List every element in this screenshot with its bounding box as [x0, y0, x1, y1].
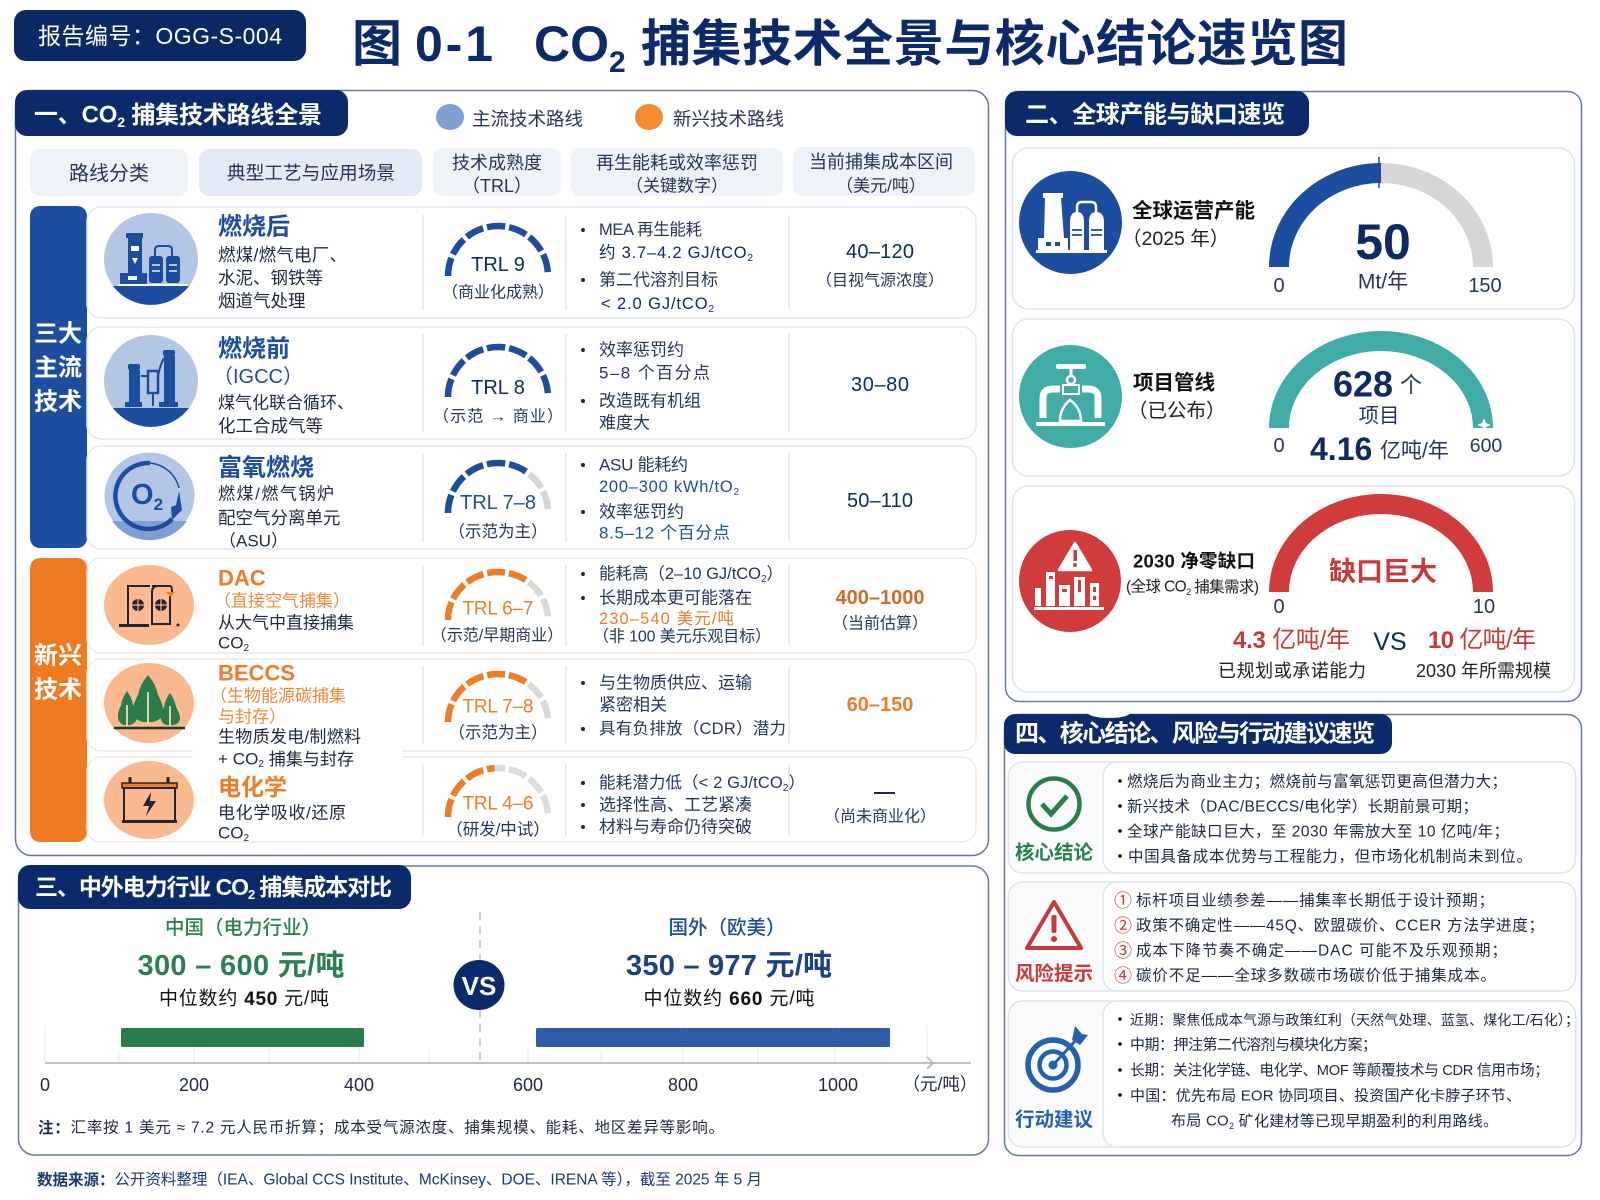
- key figures: 改造既有机组: [599, 392, 701, 410]
- actions list: 2: [1229, 1121, 1234, 1131]
- route description: [214, 566, 354, 654]
- cost range: （当前估算）: [832, 614, 928, 632]
- card: core conclusions: [1008, 762, 1576, 873]
- title: 图: [352, 16, 402, 72]
- card: action recommendations: [1008, 1001, 1579, 1147]
- risks list: 成本下降节奏不确定——DAC 可能不及乐观预期；: [1136, 942, 1507, 960]
- cost range: 400–1000: [836, 587, 924, 609]
- key figures: 能耗高（2–10 GJ/tCO: [599, 565, 761, 583]
- route description: 与封存）: [218, 708, 286, 726]
- gauge: large gap: 缺口巨大: [1329, 557, 1437, 587]
- gauge: TRL 4-6: （研发/中试）: [446, 820, 550, 839]
- table header row: 技术成熟度: [452, 153, 542, 173]
- BECCS overflow line: 捕集与封存: [264, 750, 354, 768]
- risks list: [1114, 891, 1544, 986]
- category bar: mainstream: 主流: [34, 354, 82, 382]
- data source: 数据来源：公开资料整理（IEA、Global CCS Institute、McKinsey、DOE、IRENA 等），截至 2025 年 5 月: [37, 1170, 762, 1188]
- key figures: （非 100 美元乐观目标）: [593, 628, 771, 646]
- gauge: TRL 7-8: TRL 7–8: [460, 492, 536, 514]
- icon: check mark: [1015, 778, 1093, 864]
- heading: section two: 二、全球产能与缺口速览: [1025, 102, 1285, 128]
- white patch bridging BECCS text: [193, 750, 402, 758]
- key figures: 长期成本更可能落在: [599, 588, 752, 608]
- gauge: TRL 7-8: [448, 674, 548, 742]
- capacity label: 全球运营产能: [1132, 198, 1255, 222]
- gap comparison: VS: [1373, 628, 1407, 656]
- route description: （IGCC）: [213, 365, 303, 388]
- China cost block: 300 – 600 元/吨: [138, 949, 344, 982]
- key figures: [581, 220, 753, 314]
- cost range: [816, 241, 944, 290]
- gauge: 628 projects: 600: [1470, 435, 1502, 457]
- gauge: TRL 8: （示范 → 商业）: [433, 408, 563, 426]
- gap comparison: 已规划或承诺能力: [1218, 661, 1366, 681]
- category bar: mainstream: 三大: [34, 320, 82, 348]
- legend: 新兴技术路线: [673, 108, 784, 130]
- icon: trees: [104, 663, 194, 743]
- gap comparison: 10 亿吨/年: [1428, 626, 1536, 654]
- key figures: 紧密相关: [599, 696, 667, 714]
- route description: 燃煤/燃气电厂、: [218, 245, 347, 265]
- overseas cost block: 350 – 977 元/吨: [626, 949, 832, 982]
- table header row: 当前捕集成本区间: [809, 152, 953, 172]
- risks list: 标杆项目业绩参差——捕集率长期低于设计预期；: [1136, 892, 1494, 910]
- key figures: 能耗潜力低（< 2 GJ/tCO: [599, 774, 783, 792]
- card: risk warnings: [1008, 882, 1576, 991]
- gauge: large gap: 0: [1273, 596, 1285, 618]
- heading: section one: 一、CO: [34, 102, 117, 128]
- cost range: 30–80: [851, 374, 909, 396]
- table header row: （关键数字）: [626, 176, 728, 196]
- icon: target with arrow: 行动建议: [1015, 1109, 1093, 1131]
- conclusions list: 燃烧后为商业主力；燃烧前与富氧惩罚更高但潜力大；: [1127, 772, 1507, 790]
- gauge: 628 projects: 0: [1273, 435, 1285, 457]
- heading: section four: 四、核心结论、风险与行动建议速览: [1015, 720, 1375, 748]
- cost range: （目视气源浓度）: [816, 272, 944, 290]
- gauge: TRL 6-7: [431, 572, 563, 644]
- gap comparison: 4.3 亿吨/年: [1233, 626, 1350, 654]
- route description: （直接空气捕集）: [214, 592, 350, 610]
- risks list: ②: [1114, 916, 1132, 936]
- route description: [213, 336, 354, 436]
- gauge: TRL 7-8: （示范为主）: [448, 522, 548, 541]
- overseas cost block: 中位数约 660 元/吨: [644, 988, 814, 1010]
- heading: section three: [18, 865, 411, 909]
- icon: O2 cycle: O: [131, 479, 154, 511]
- row: oxy-fuel combustion: [87, 446, 976, 550]
- gauge: large gap: [1273, 504, 1495, 618]
- exchange-rate note: 注：汇率按 1 美元 ≈ 7.2 元人民币折算；成本受气源浓度、捕集规模、能耗、地区差异等影响。: [38, 1118, 724, 1136]
- key figures: 2: [761, 574, 767, 584]
- route description: [218, 454, 340, 550]
- gauge: 628 projects: 4.16: [1310, 431, 1372, 467]
- gauge: 50 Mt per year: 0: [1273, 275, 1285, 297]
- row: pre-combustion: [87, 327, 976, 439]
- key figures: 200–300 kWh/tO: [599, 478, 733, 496]
- gauge: TRL 7-8: （示范为主）: [448, 723, 548, 742]
- row: DAC: [87, 558, 976, 654]
- icon: O2 cycle: [104, 452, 194, 540]
- legend: [436, 104, 784, 130]
- route description: 生物质发电/制燃料: [218, 728, 361, 746]
- icon: battery: [104, 761, 194, 839]
- route description: 富氧燃烧: [218, 454, 314, 482]
- heading: section four: [1004, 708, 1392, 754]
- gauge: TRL 9: TRL 9: [471, 254, 525, 276]
- gauge: 628 projects: 个: [1400, 372, 1422, 398]
- key figures: 2: [783, 782, 789, 794]
- route description: 水泥、钢铁等: [218, 268, 323, 288]
- route description: [218, 774, 346, 844]
- gauge: 628 projects: 项目: [1358, 404, 1400, 428]
- gauge: TRL 8: TRL 8: [471, 377, 525, 399]
- heading: section three: 2: [248, 886, 255, 902]
- icon: post-combustion plant: [104, 213, 198, 305]
- legend: 主流技术路线: [472, 108, 583, 130]
- gauge: TRL 9: [442, 226, 554, 302]
- heading: section one: 捕集技术路线全景: [125, 102, 322, 128]
- row: electrochemistry: [87, 750, 976, 844]
- gauge: TRL 6-7: TRL 6–7: [462, 598, 534, 620]
- table header row: （美元/吨）: [836, 176, 926, 196]
- key figures: 2: [733, 486, 739, 498]
- icon: warning and bars: [1019, 530, 1121, 632]
- category bar: emerging: [30, 558, 87, 842]
- key figures: 难度大: [599, 414, 650, 432]
- range chart: 200: [179, 1075, 209, 1095]
- key figures: 材料与寿命仍待突破: [599, 818, 752, 836]
- range chart: 1000: [818, 1075, 858, 1095]
- China cost block: 中国（电力行业）: [165, 917, 321, 939]
- key figures: 约 3.7–4.2 GJ/tCO: [599, 244, 747, 262]
- title: CO: [534, 16, 609, 72]
- card: project pipeline: [1012, 319, 1574, 476]
- route description: BECCS: [218, 660, 295, 686]
- overseas cost block: [626, 917, 832, 1010]
- route description: CO: [218, 824, 244, 842]
- table header row: 典型工艺与应用场景: [227, 162, 395, 184]
- actions list: [1118, 1012, 1579, 1131]
- gauge: large gap: 10: [1473, 596, 1495, 618]
- key figures: ）: [766, 564, 783, 583]
- range chart: [40, 1025, 977, 1095]
- risks list: 碳价不足——全球多数碳市场碳价低于捕集成本。: [1136, 966, 1496, 984]
- key figures: 2: [708, 304, 714, 314]
- route description: DAC: [218, 566, 266, 590]
- route description: 配空气分离单元: [218, 508, 340, 528]
- conclusions list: 新兴技术（DAC/BECCS/电化学）长期前景可期；: [1127, 798, 1478, 816]
- icon: capture plant: [1019, 171, 1122, 274]
- gauge: 50 Mt per year: 50: [1355, 214, 1411, 270]
- report number badge: [14, 10, 306, 61]
- cost range: 50–110: [847, 490, 913, 512]
- cost range: 40–120: [846, 241, 914, 263]
- route description: 从大气中直接捕集: [218, 614, 354, 632]
- title: 0-1: [415, 16, 493, 72]
- capacity label: （2025 年）: [1122, 228, 1229, 250]
- icon: warning triangle: [1015, 902, 1093, 985]
- route description: 燃烧后: [218, 214, 290, 240]
- gauge: TRL 8: [433, 347, 563, 426]
- key figures: [581, 340, 710, 432]
- China cost block: 中位数约 450 元/吨: [159, 988, 329, 1010]
- row: BECCS: [87, 659, 976, 751]
- route description: 燃烧前: [218, 336, 290, 362]
- category bar: mainstream: 技术: [34, 388, 82, 416]
- gauge: 50 Mt per year: Mt/年: [1358, 270, 1408, 294]
- gauge: TRL 4-6: [446, 768, 550, 839]
- gauge: 628 projects: 亿吨/年: [1380, 440, 1449, 462]
- key figures: MEA 再生能耗: [599, 220, 702, 239]
- actions list: 矿化建材等已现早期盈利的利用路线。: [1234, 1112, 1498, 1130]
- title: 2: [609, 46, 626, 78]
- heading: section three: 三、中外电力行业 CO: [35, 874, 249, 900]
- risks list: ④: [1114, 966, 1132, 986]
- key figures: 具有负排放（CDR）潜力: [599, 719, 786, 738]
- table header row: （TRL）: [462, 176, 532, 196]
- route description: 电化学吸收/还原: [218, 804, 346, 822]
- table header row: 再生能耗或效率惩罚: [596, 153, 758, 173]
- cost range: [824, 792, 936, 826]
- risks list: ③: [1114, 941, 1132, 961]
- card: operating capacity: [1012, 148, 1574, 309]
- gauge: TRL 4-6: TRL 4–6: [462, 794, 534, 814]
- BECCS overflow line: + CO: [218, 750, 258, 768]
- icon: warning triangle: 风险提示: [1015, 962, 1093, 985]
- gauge: 628 projects: [1273, 341, 1502, 467]
- conclusions list: 中国具备成本优势与工程能力，但市场化机制尚未到位。: [1128, 848, 1532, 866]
- route description: 2: [244, 832, 250, 844]
- gauge: TRL 7-8: [448, 463, 548, 541]
- icon: valve and pipes: [1019, 345, 1122, 448]
- actions list: 布局 CO: [1171, 1112, 1229, 1130]
- conclusions list: 全球产能缺口巨大，至 2030 年需放大至 10 亿吨/年；: [1127, 822, 1509, 840]
- route description: 煤气化联合循环、: [218, 394, 354, 412]
- actions list: 长期：关注化学链、电化学、MOF 等颠覆技术与 CDR 信用市场；: [1130, 1061, 1549, 1079]
- route description: 燃煤/燃气锅炉: [218, 484, 334, 504]
- BECCS overflow line: 2: [258, 758, 264, 770]
- pipeline label: （已公布）: [1128, 400, 1226, 422]
- icon: target with arrow: [1015, 1026, 1093, 1131]
- route description: 烟道气处理: [218, 291, 306, 311]
- key figures: [581, 456, 739, 542]
- key figures: 效率惩罚约: [599, 502, 684, 522]
- panel: global capacity and gap: [1005, 91, 1582, 702]
- title: [352, 16, 1348, 78]
- route description: 电化学: [218, 774, 287, 800]
- cost range: 60–150: [847, 694, 913, 716]
- row: post-combustion: [87, 207, 976, 318]
- heading: section two: [1005, 91, 1309, 136]
- key figures: 第二代溶剂目标: [599, 270, 718, 290]
- route description: （ASU）: [219, 532, 288, 550]
- key figures: 230–540 美元/吨: [599, 609, 734, 628]
- icon: check mark: 核心结论: [1015, 841, 1093, 864]
- pipeline label: [1128, 372, 1226, 422]
- actions list: 中国：优先布局 EOR 协同项目、投资国产化卡脖子环节、: [1130, 1088, 1521, 1104]
- heading: section three: 捕集成本对比: [254, 874, 392, 900]
- panel: conclusions, risks and actions: [1004, 708, 1582, 1156]
- gap comparison: 2030 年所需规模: [1416, 661, 1551, 681]
- cost range: [832, 587, 928, 632]
- key figures: < 2.0 GJ/tCO: [601, 295, 708, 313]
- pipeline label: 项目管线: [1133, 372, 1215, 394]
- actions list: 中期：押注第二代溶剂与模块化方案；: [1130, 1036, 1377, 1054]
- route description: CO: [218, 634, 244, 652]
- category bar: emerging: 技术: [34, 676, 82, 704]
- category bar: mainstream: [30, 206, 87, 548]
- key figures: 5–8 个百分点: [599, 364, 710, 382]
- gap label: 2: [1186, 587, 1191, 597]
- gap label: (全球 CO: [1126, 578, 1187, 596]
- key figures: 选择性高、工艺紧凑: [599, 796, 752, 814]
- range chart: （元/吨）: [903, 1074, 977, 1094]
- category bar: emerging: 新兴: [34, 642, 82, 670]
- title: 捕集技术全景与核心结论速览图: [641, 16, 1348, 72]
- divider and VS badge: VS: [462, 971, 496, 1001]
- route description: 2: [244, 642, 250, 654]
- table header row: [30, 147, 975, 196]
- key figures: [581, 564, 783, 646]
- divider and VS badge: [454, 912, 504, 1063]
- range chart: 800: [668, 1075, 698, 1095]
- gap comparison: [1218, 626, 1551, 681]
- key figures: 2: [747, 252, 753, 264]
- icon: O2 cycle: 2: [154, 494, 163, 514]
- range chart: 600: [513, 1075, 543, 1095]
- icon: IGCC towers: [104, 335, 198, 427]
- route description: [210, 660, 361, 746]
- risks list: ①: [1114, 891, 1132, 911]
- panel: technology routes overview: [15, 90, 988, 856]
- capacity label: [1122, 198, 1255, 250]
- gap label: 捕集需求): [1191, 578, 1259, 596]
- route description: （生物能源碳捕集: [210, 686, 346, 706]
- key figures: 8.5–12 个百分点: [599, 524, 730, 542]
- key figures: 与生物质供应、运输: [599, 674, 752, 692]
- key figures: ASU 能耗约: [599, 456, 688, 474]
- gauge: 628 projects: 628: [1333, 364, 1393, 404]
- gap label: 2030 净零缺口: [1133, 550, 1255, 572]
- actions list: 近期：聚焦低成本气源与政策红利（天然气处理、蓝氢、煤化工/石化）；: [1130, 1012, 1579, 1029]
- gauge: TRL 7-8: TRL 7–8: [462, 696, 534, 718]
- card: 2030 net-zero gap: [1012, 486, 1574, 692]
- risks list: 政策不确定性——45Q、欧盟碳价、CCER 方法学进度；: [1136, 916, 1544, 934]
- key figures: [581, 674, 786, 738]
- route description: [218, 214, 347, 311]
- key figures: [581, 773, 805, 836]
- China cost block: [138, 917, 344, 1010]
- key figures: ）: [788, 773, 805, 792]
- report number badge: 报告编号：OGG-S-004: [38, 23, 282, 49]
- panel: cost comparison: [18, 865, 988, 1155]
- icon: direct air capture unit: [104, 565, 194, 645]
- overseas cost block: 国外（欧美）: [668, 917, 786, 939]
- gauge: TRL 6-7: （示范/早期商业）: [431, 626, 563, 644]
- conclusions list: [1118, 772, 1532, 866]
- gauge: 50 Mt per year: 150: [1468, 275, 1502, 297]
- cost range: （尚未商业化）: [824, 808, 936, 826]
- heading: section one: 2: [117, 114, 125, 130]
- gauge: 50 Mt per year: [1273, 157, 1502, 297]
- heading: section one: [15, 90, 348, 136]
- gap label: [1126, 550, 1259, 597]
- range chart: 0: [40, 1075, 50, 1095]
- key figures: 效率惩罚约: [599, 340, 684, 360]
- range chart: 400: [344, 1075, 374, 1095]
- route description: 化工合成气等: [218, 416, 323, 436]
- gauge: TRL 9: （商业化成熟）: [442, 284, 554, 302]
- table header row: 路线分类: [69, 162, 149, 185]
